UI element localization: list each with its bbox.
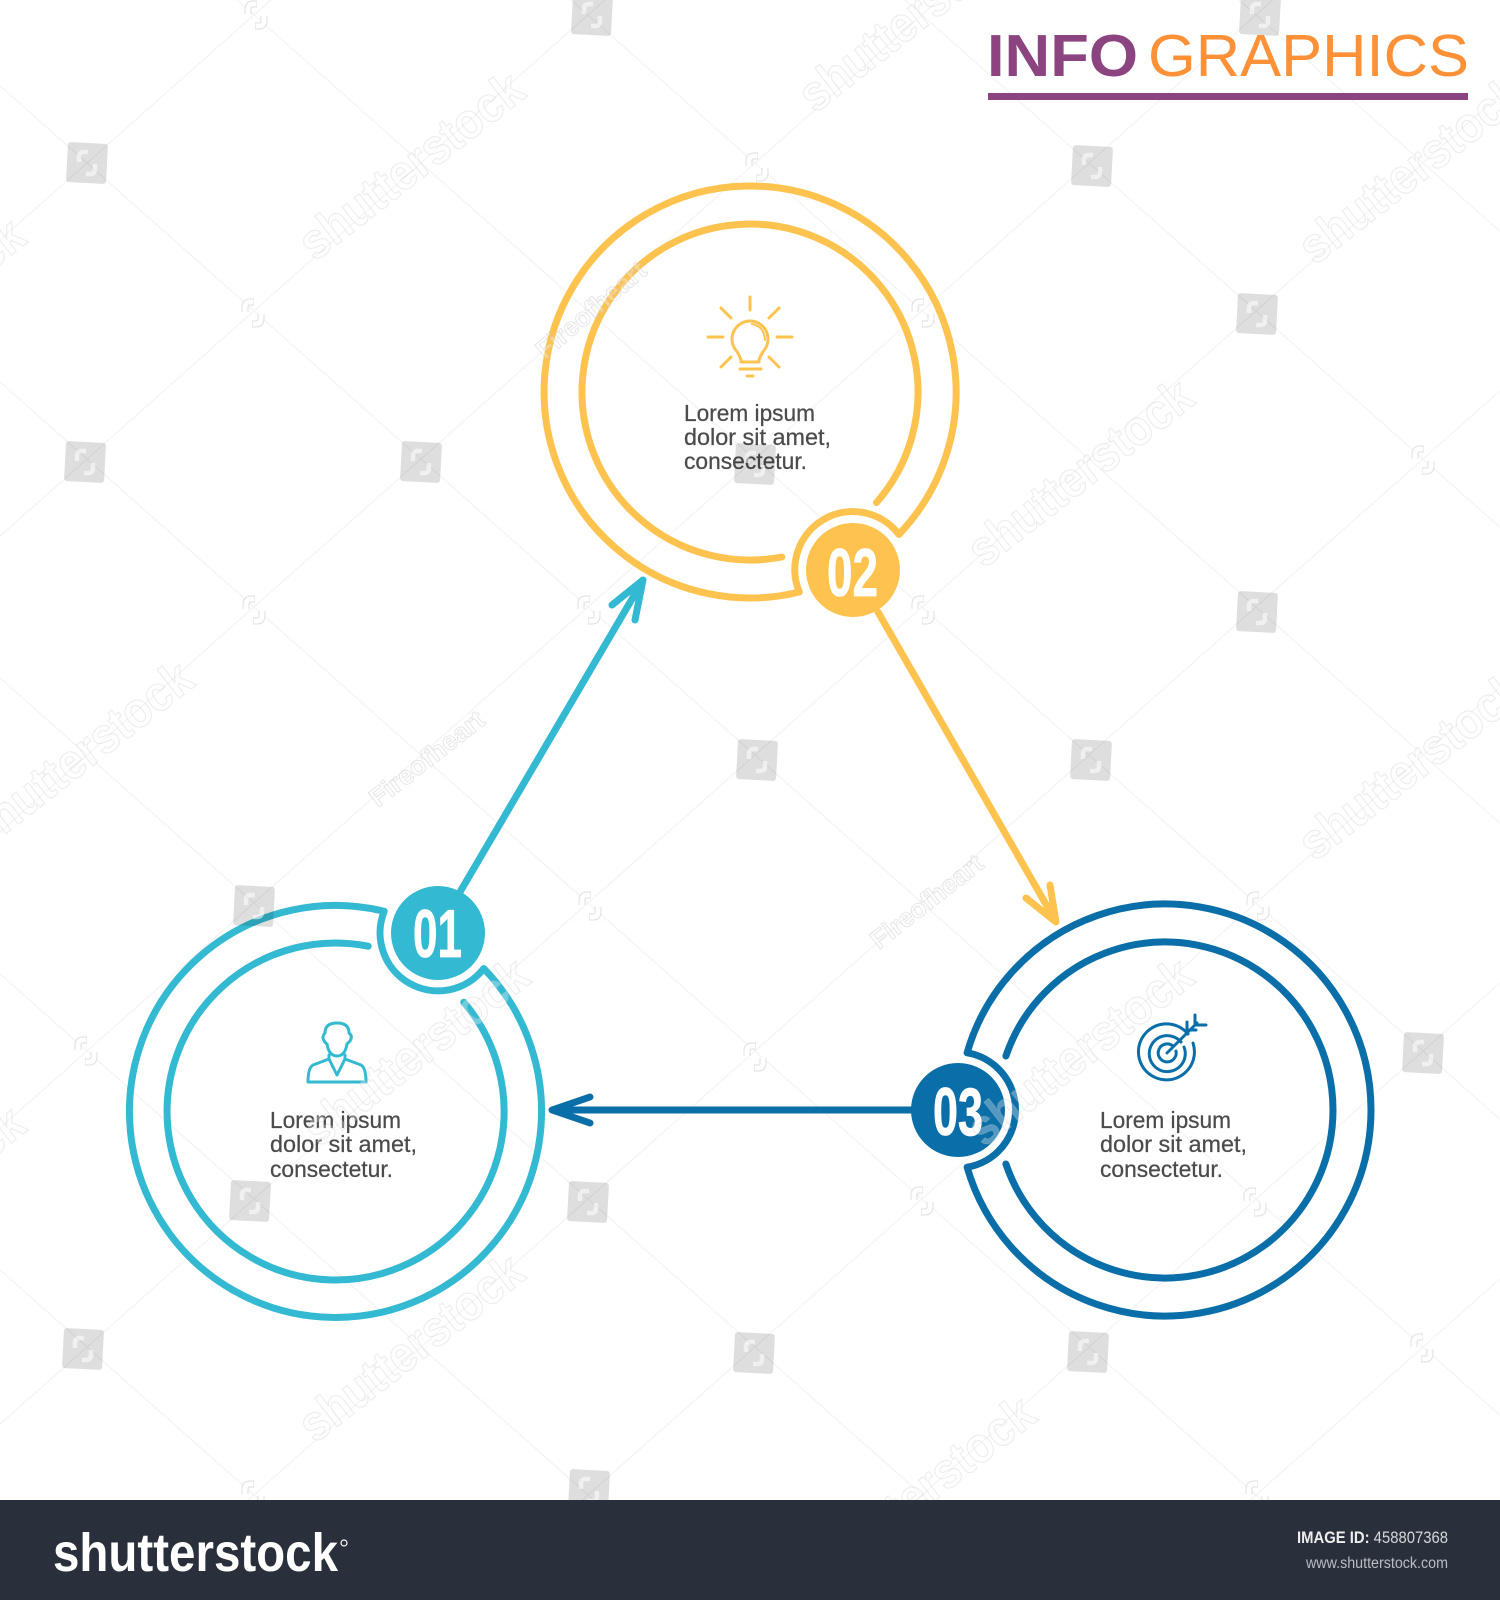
panel: step 01 person [129,886,541,1317]
watermark pattern: shutterstock [798,1384,1046,1595]
number badge 03 [911,1063,1005,1157]
text: step 02 description: Lorem ipsum [684,400,815,426]
text: step 03 description: Lorem ipsum [1100,1107,1231,1133]
panel: step 02 idea [544,186,956,617]
number badge 02 [806,523,900,617]
footer bar [0,1500,1500,1600]
outer ring with badge notch, step 03 [967,904,1371,1316]
text: step 03 description: consectetur. [1100,1156,1223,1182]
watermark pattern: shutterstock [292,946,540,1157]
arrow: step 03 to step 01 [552,1097,912,1123]
text: step 01 description: dolor sit amet, [270,1131,417,1157]
title: INFOGRAPHICS [987,23,1469,100]
number badge 02: 02 [827,535,878,611]
outer ring with badge notch, step 02 [544,186,956,598]
text: step 02 description: dolor sit amet, [684,424,831,450]
title: INFOGRAPHICS: INFO [987,23,1138,89]
number badge 01 [391,886,485,980]
watermark pattern: shutterstock [956,946,1204,1157]
icon: light bulb [708,297,792,376]
title: INFOGRAPHICS: GRAPHICS [1148,23,1469,89]
inner ring, step 03 [1006,942,1333,1278]
watermark pattern: Fireofheart [363,704,491,813]
text: step 01 description: Lorem ipsum [270,1107,401,1133]
inner ring, step 01 [167,943,504,1280]
footer logo: shutterstock [53,1523,339,1583]
inner ring, step 02 [582,224,918,560]
icon: person [308,1023,366,1082]
watermark pattern: shutterstock [287,60,535,271]
watermark pattern: shutterstock [287,1242,535,1453]
text: step 01 description: consectetur. [270,1156,393,1182]
watermark pattern: shutterstock [956,367,1204,578]
icon: target with arrow [1138,1015,1206,1080]
arrow: step 01 to step 02 [460,580,643,892]
text: step 03 description [1100,1107,1247,1182]
footer image id: IMAGE ID: 458807368 [1297,1528,1448,1547]
arrow: step 02 to step 03 [878,612,1056,922]
number badge 01: 01 [413,896,462,972]
text: step 01 description [270,1107,417,1182]
text: step 02 description [684,400,831,474]
watermark pattern: Fireofheart [864,848,989,955]
outer ring with badge notch, step 01 [129,905,541,1317]
text: step 03 description: dolor sit amet, [1100,1131,1247,1157]
panel: step 03 target [911,904,1371,1316]
text: step 02 description: consectetur. [684,448,807,474]
number badge 03: 03 [933,1074,983,1150]
watermark pattern: Fireofheart [530,255,653,365]
footer url: www.shutterstock.com [1305,1555,1448,1572]
